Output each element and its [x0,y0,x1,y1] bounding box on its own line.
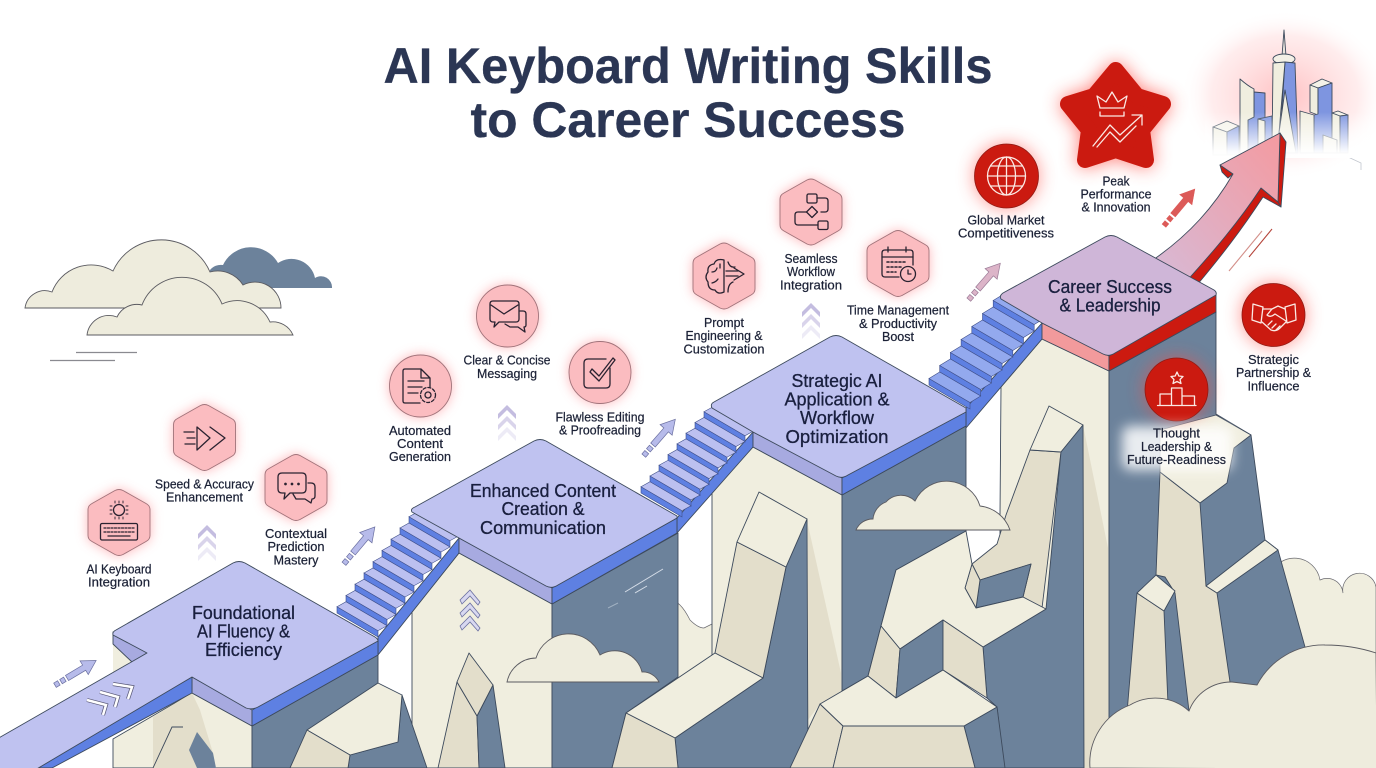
skill: Global Market [958,144,1054,240]
label glow [1122,426,1232,470]
label: Workflow [787,265,836,279]
background cloud between columns [670,600,716,700]
platform 2 title: Communication [480,518,606,538]
label: Strategic [1248,353,1299,367]
speed lines on column 2 [608,569,663,608]
label: Partnership & [1236,366,1312,380]
label: Integration [88,576,150,590]
label: Performance [1080,188,1152,202]
label [464,354,551,381]
platform 4 career [1000,236,1216,371]
platform 1 title: AI Fluency & [197,622,290,642]
label [684,316,765,356]
skill: Time Management [847,230,950,344]
stairs 1 [337,512,459,655]
icon: flowchart [795,194,828,230]
label: Integration [780,278,842,292]
platform 2 title [470,481,616,538]
icon: document and gear [403,369,436,403]
label: Contextual [265,527,327,541]
label: Competitiveness [958,226,1054,240]
background cloud right [1270,558,1376,720]
stairs 2 [641,407,754,533]
platform 4 title: & Leadership [1060,296,1160,316]
label: Content [397,437,444,451]
skill: Clear and Concise Messaging [464,285,551,381]
platform 3 title [784,371,890,447]
label: Global Market [968,214,1045,228]
label: Prediction [268,540,325,554]
label: & Proofreading [559,424,641,438]
label: Leadership & [1141,440,1213,454]
label: Generation [389,450,451,464]
platform 3 title: Workflow [800,408,875,428]
platform 1 with ramp [0,562,378,768]
label [389,424,451,464]
icon: handshake [1252,304,1296,331]
label: Seamless [784,252,838,266]
skill: Seamless Workflow [780,179,842,292]
title: AI Keyboard Writing Skills [384,38,992,94]
platform 2 title: Creation & [502,499,584,519]
label [780,252,842,292]
skill: Thought Leadership [1122,358,1232,470]
skill: Contextual Prediction [265,454,327,568]
label: Influence [1248,380,1300,394]
icon: checkbox [584,358,615,388]
title [384,38,992,148]
big red success arrow [1150,133,1286,285]
skill: Speed and Accuracy [155,404,255,504]
small arrow 3 [638,414,681,461]
city skyline [1180,10,1376,180]
label: Time Management [847,304,950,318]
icon: crown and chart [1093,92,1142,147]
column 3 stepped rock [675,426,966,768]
label: Engineering & [686,329,763,343]
platform 3 title: Application & [784,390,890,410]
label: Prompt [704,316,745,330]
skill: Strategic Partnership [1236,284,1312,394]
column 5 slate cliff [1109,312,1305,768]
platform 2 title: Enhanced Content [470,481,616,501]
label: Peak [1102,174,1130,188]
skill: AI Keyboard Integration [86,490,152,590]
label: Future-Readiness [1127,453,1226,467]
label: & Innovation [1082,200,1151,214]
label: Boost [882,330,915,344]
icon: mail bubble [490,301,526,332]
label: Mastery [274,554,319,568]
skill: Prompt Engineering [684,243,765,356]
front cloud bottom right [1090,645,1376,768]
icon: podium and star [1158,372,1196,406]
icon: calendar with clock [882,247,916,282]
icon: fast forward [184,427,225,450]
column 2 [412,533,763,768]
ramp chevrons [87,684,132,715]
up chevrons above platform 1 [198,525,216,561]
label: Messaging [477,367,537,381]
label: Enhancement [166,490,244,504]
platform 2 [411,440,677,604]
skill: Peak Performance star [1068,70,1163,214]
label [1236,353,1312,394]
label: & Productivity [859,317,938,331]
platform 3 title: Strategic AI [792,371,882,391]
title: to Career Success [470,92,906,148]
platform 4 title [1048,277,1172,316]
clouds in front of columns [507,481,1010,682]
platform 3 [711,336,966,495]
column 3 and 4 lower rock [790,531,1046,768]
label [155,478,255,504]
label: Flawless Editing [556,410,645,424]
decorative chevrons on column 2 [460,590,480,631]
platform 1 title [192,603,295,660]
label: Speed & Accuracy [155,478,255,492]
column 4 and rock formations [965,339,1109,768]
label [1080,174,1152,214]
platform 4 title: Career Success [1048,277,1172,297]
small arrow 5 [1158,184,1201,231]
label: Customization [684,342,765,356]
skill: Automated Content Generation [389,355,452,464]
label [86,562,152,590]
icon: keyboard and chip [100,501,138,540]
platform 3 title: Optimization [786,427,888,447]
up chevrons above platform 2 [498,405,516,441]
label [847,304,950,344]
up chevrons above platform 3 [802,303,820,339]
icon: globe [988,157,1026,195]
platform 1 title: Foundational [192,603,295,623]
platform 1 title: Efficiency [205,640,282,660]
label: AI Keyboard [86,562,152,576]
label: Thought [1153,426,1201,440]
label [958,214,1054,240]
skill: Flawless Editing [556,342,645,438]
label [265,527,327,568]
label [1127,426,1226,467]
icon: chat bubbles [278,473,315,503]
label [556,410,645,438]
small arrow 4 [963,258,1006,305]
clouds top left [25,240,332,360]
small arrow 1 [51,654,100,692]
label: Automated [389,424,451,438]
small arrow 2 [338,522,381,569]
label: Clear & Concise [464,354,551,368]
motion lines by arrow [1229,229,1272,271]
column 1 [113,642,427,768]
icon: brain with arrow [706,260,744,293]
stairs 3 [929,294,1045,428]
